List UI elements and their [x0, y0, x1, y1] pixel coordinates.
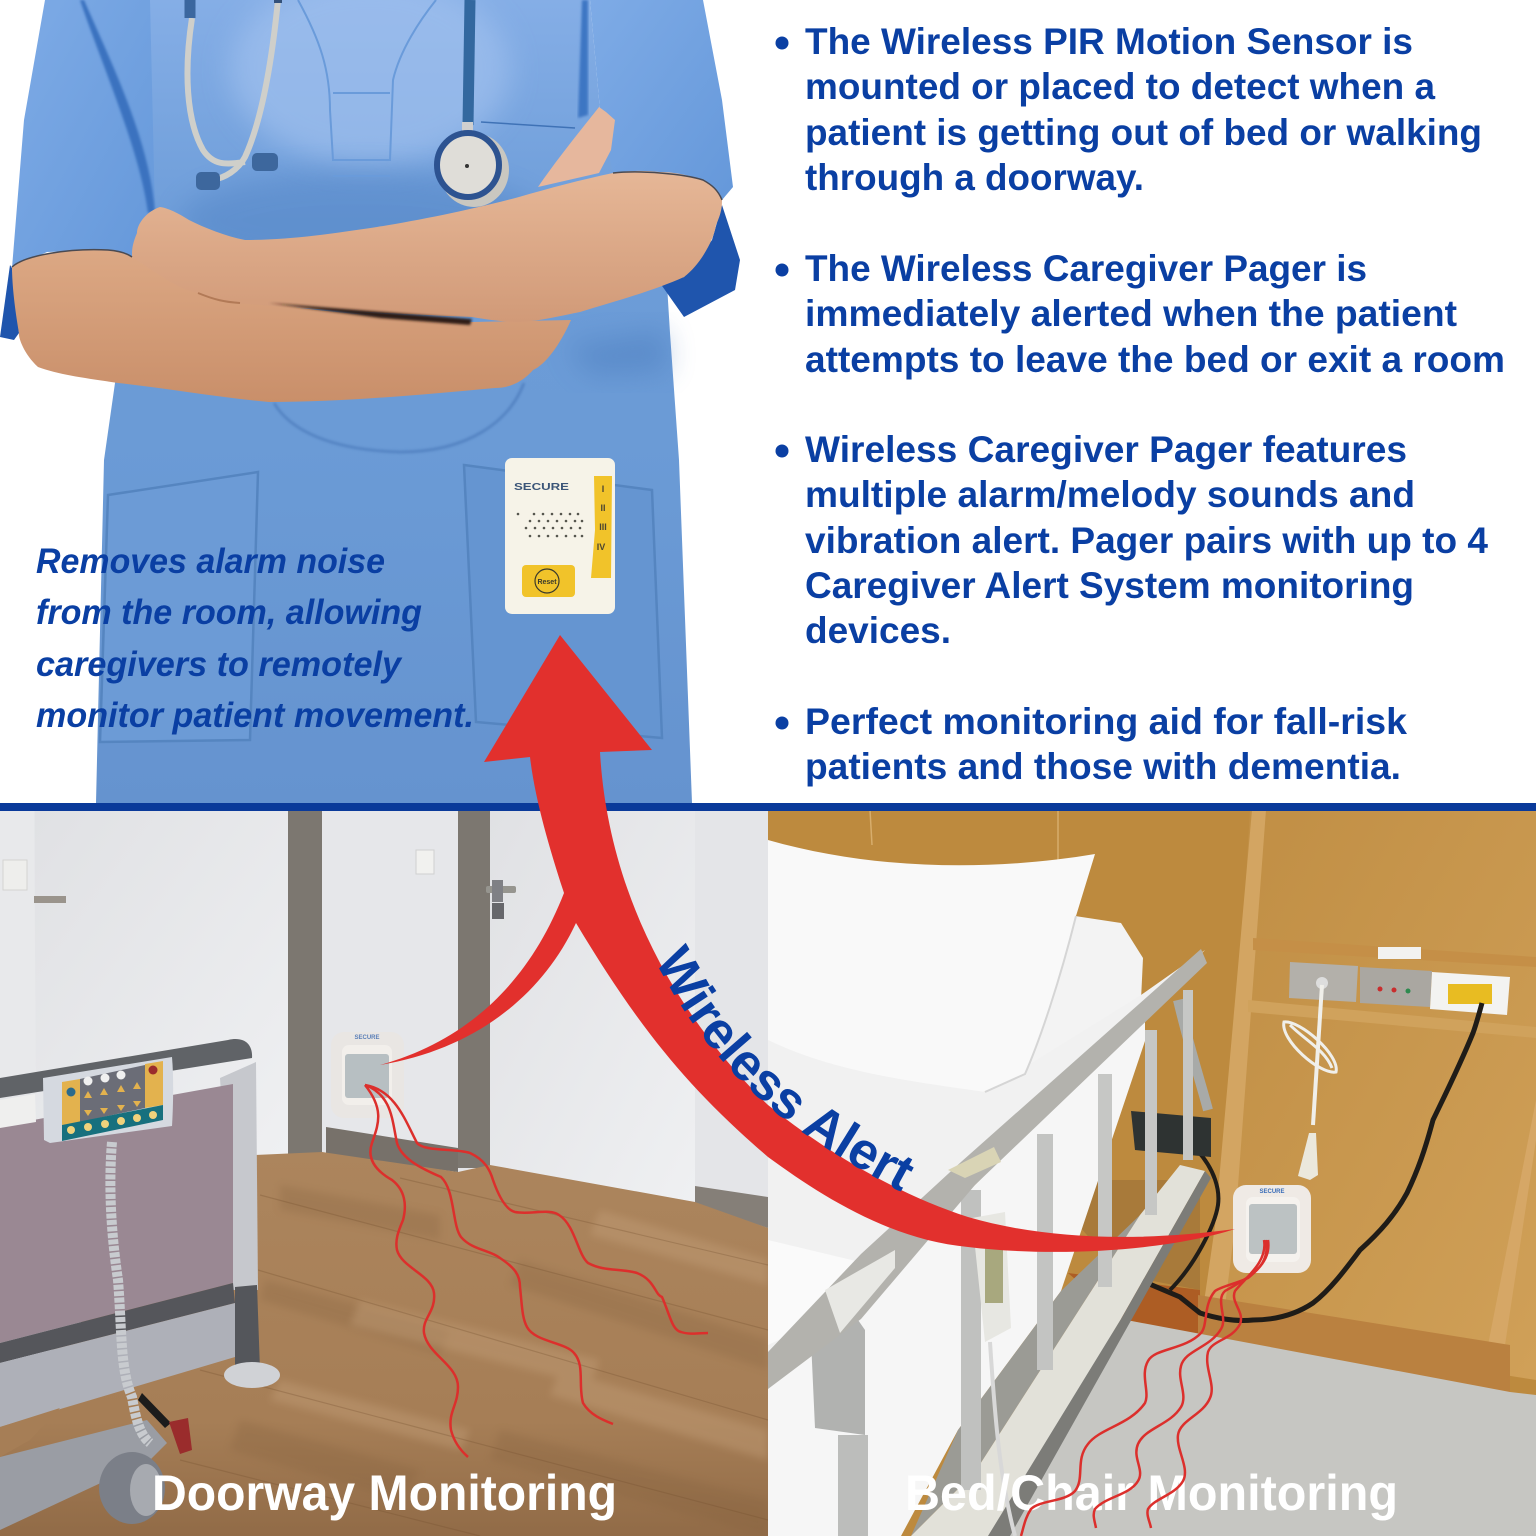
icon: caregiver pager: III [599, 522, 607, 532]
bullet: fall-risk patients: patients and those with dementia. [805, 746, 1401, 787]
divider band [0, 803, 1536, 811]
arrow: wireless alert curve [380, 635, 1235, 1252]
stethoscope [187, 0, 509, 207]
bed rails [768, 949, 1211, 1536]
callout: remote monitoring text: caregivers to remotely [36, 645, 402, 684]
wall plates and cables [1140, 947, 1510, 1321]
bullet: PIR motion sensor: The Wireless PIR Motion Sensor is [805, 21, 1413, 62]
icon: caregiver pager: II [600, 503, 606, 513]
lower scrub pockets [100, 465, 662, 742]
callout: remote monitoring text: Removes alarm noise [36, 542, 385, 581]
crossed arms [12, 107, 722, 402]
arrow label: wireless alert: Wireless Alert [659, 942, 914, 1192]
icon: caregiver pager: Reset [537, 579, 557, 586]
bullet: pager features: vibration alert. Pager pairs with up to 4 [805, 520, 1488, 561]
icon: bed control panel [43, 1057, 173, 1143]
icon: bed hand controller [972, 1212, 1015, 1536]
bullet: caregiver pager alert: The Wireless Caregiver Pager is [805, 248, 1367, 289]
icon: PIR motion sensor doorway: SECURE [354, 1035, 380, 1041]
text block: feature bullets [776, 21, 1505, 787]
bed chair monitoring label: Bed/Chair Monitoring [905, 1465, 1398, 1521]
icon: caregiver pager [505, 458, 615, 614]
motion waves: doorway [365, 1085, 708, 1457]
bullet: PIR motion sensor [776, 21, 1482, 198]
motion waves: bed [1021, 1240, 1268, 1536]
bed mattress and sheets [768, 916, 1205, 1536]
panel: doorway monitoring photo [0, 810, 768, 1536]
icon: PIR motion sensor bed [1233, 1185, 1311, 1273]
bullet: PIR motion sensor: through a doorway. [805, 157, 1144, 198]
bullet: pager features: Wireless Caregiver Pager features [805, 429, 1407, 470]
icon: caregiver pager: I [602, 484, 604, 494]
bullet: pager features [776, 429, 1488, 651]
callout: remote monitoring text [36, 542, 474, 735]
bullet: fall-risk patients: Perfect monitoring aid for fall-risk [805, 701, 1407, 742]
wood floor [0, 1152, 768, 1536]
bullet: pager features: devices. [805, 610, 951, 651]
bullet: pager features: multiple alarm/melody sounds and [805, 474, 1415, 515]
panel: nurse photo [0, 0, 740, 803]
bullet: PIR motion sensor: mounted or placed to detect when a [805, 66, 1435, 107]
bullet: fall-risk patients [776, 701, 1407, 787]
icon: caregiver pager: IV [597, 542, 605, 552]
panel: bed and chair monitoring photo [768, 810, 1536, 1536]
bullet: caregiver pager alert: immediately alerted when the patient [805, 293, 1457, 334]
callout: remote monitoring text: monitor patient movement. [36, 696, 474, 735]
hospital bed [0, 1039, 280, 1530]
icon: caregiver pager: SECURE [514, 482, 569, 493]
pillow [768, 840, 1095, 1092]
doorway monitoring label: Doorway Monitoring [152, 1465, 617, 1521]
bullet: pager features: Caregiver Alert System monitoring [805, 565, 1414, 606]
callout: remote monitoring text: from the room, allowing [36, 593, 422, 632]
power strip under bed [1131, 1111, 1211, 1157]
scrub top [0, 0, 740, 803]
bullet: caregiver pager alert [776, 248, 1505, 380]
bullet: caregiver pager alert: attempts to leave the bed or exit a room [805, 339, 1505, 380]
bullet: PIR motion sensor: patient is getting out of bed or walking [805, 112, 1482, 153]
icon: PIR motion sensor doorway [331, 1032, 404, 1118]
icon: PIR motion sensor bed: SECURE [1259, 1189, 1285, 1195]
